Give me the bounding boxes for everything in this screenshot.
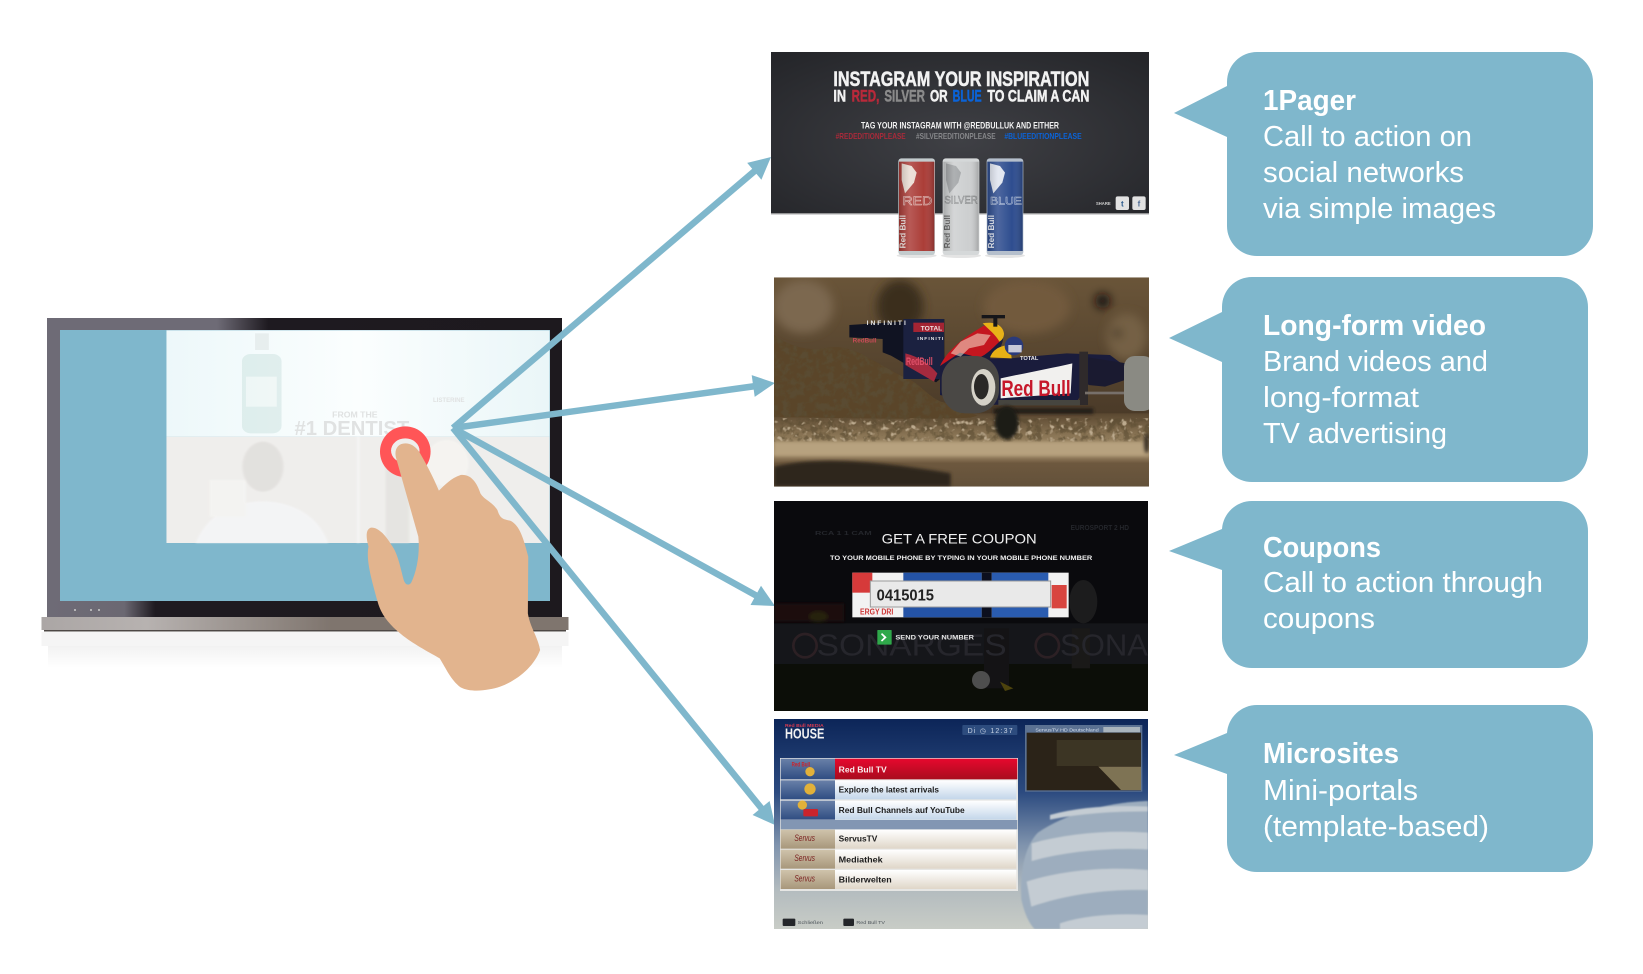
panel headline: IN [833, 87, 846, 106]
car body: Red Bull [1001, 376, 1071, 401]
share buttons: f [1138, 199, 1141, 208]
brush stroke decoration [1021, 801, 1148, 929]
callout: Long-form video [1169, 277, 1588, 482]
rear wing: INFINITI [917, 336, 944, 342]
ghost headline [295, 396, 465, 440]
callout: Coupons: Call to action through [1263, 567, 1543, 599]
tv preview [1025, 725, 1142, 792]
video overlay on screen [166, 330, 550, 543]
panel headline: #SILVEREDITIONPLEASE [916, 131, 996, 141]
background football players [972, 580, 1097, 691]
callout: Microsites: Mini-portals [1263, 775, 1418, 807]
menu labels: Mediathek [839, 855, 883, 864]
dust cloud background [773, 280, 1147, 360]
sponsor board [792, 632, 1148, 658]
monitor bezel [47, 318, 562, 617]
ghost headline: #1 DENTIST [295, 416, 409, 440]
ghost bottle [242, 333, 282, 433]
callout: 1Pager [1174, 52, 1593, 256]
footer hints: Red Bull TV [856, 920, 886, 925]
panel headline: RED, [852, 87, 879, 106]
menu labels: ServusTV [839, 835, 878, 844]
menu labels: Red Bull TV [839, 765, 887, 774]
phone number field: ERGY DRI [860, 607, 893, 616]
coupon heading [830, 534, 1092, 560]
icon: silver can: SILVER [944, 194, 978, 206]
callout: Microsites: Microsites [1263, 738, 1399, 770]
sponsor board: SONARGES [817, 629, 1007, 663]
panel headline: TO CLAIM A CAN [987, 87, 1089, 106]
callout: 1Pager: social networks [1263, 157, 1464, 189]
arrow to microsites [453, 428, 775, 825]
media house logo: HOUSE [785, 727, 824, 743]
panel headline: BLUE [953, 87, 982, 106]
icon: blue can: BLUE [990, 196, 1022, 208]
panel: coupons screenshot [774, 501, 1149, 711]
phone number field: 0415015 [877, 587, 934, 604]
clock pill: Di ◷ 12:37 [968, 728, 1013, 735]
media house logo: Red Bull MEDIA [785, 723, 824, 729]
callout: Long-form video: Brand videos and [1263, 346, 1488, 378]
icon: silver can [941, 158, 981, 258]
menu labels: Explore the latest arrivals [839, 786, 940, 795]
monitor reflection [42, 632, 568, 668]
callout: 1Pager: Call to action on [1263, 121, 1472, 153]
rear wing: RedBull [906, 356, 933, 368]
icon: blue can [985, 158, 1025, 258]
menu row icons [792, 763, 818, 883]
coupon heading: GET A FREE COUPON [882, 532, 1037, 547]
ghost headline: FROM THE [332, 410, 378, 419]
panel headline: OR [930, 87, 948, 106]
arrow to 1Pager [453, 157, 771, 428]
touch gesture [367, 426, 540, 691]
car body: TOTAL [1020, 356, 1039, 362]
panel headline: #BLUEEDITIONPLEASE [1004, 131, 1082, 141]
menu row icons: Red Bull [792, 763, 810, 769]
panel headline [833, 67, 1089, 141]
panel headline: #REDEDITIONPLEASE [836, 131, 906, 141]
sponsor board: SONA [1060, 629, 1149, 663]
callout: Coupons: coupons [1263, 603, 1375, 635]
icon: red can: Red Bull [898, 215, 908, 248]
panel: microsite screenshot [774, 719, 1148, 929]
smudges [995, 406, 1149, 453]
share buttons [1096, 196, 1146, 210]
panel headline: SILVER [884, 87, 925, 106]
send button [877, 630, 974, 645]
car body [940, 315, 1127, 405]
callout: Long-form video: TV advertising [1263, 418, 1447, 450]
rear wing [849, 319, 944, 382]
rear wing: TOTAL [921, 326, 942, 333]
menu row icons: Servus [794, 873, 815, 883]
callout: Microsites: (template-based) [1263, 811, 1489, 843]
panel headline: TAG YOUR INSTAGRAM WITH @REDBULLUK AND EITHER [861, 120, 1059, 130]
arrow to long-form video [453, 375, 775, 428]
icon: red can: RED [902, 194, 933, 208]
callout: Coupons [1169, 501, 1588, 668]
rear wing: RedBull [853, 338, 877, 345]
menu labels [839, 765, 965, 885]
laptop screen device [42, 318, 568, 668]
send button: SEND YOUR NUMBER [895, 635, 974, 642]
ghost presenter [196, 437, 469, 543]
menu row icons: Servus [794, 853, 815, 863]
panel: 1Pager screenshot [771, 52, 1149, 258]
monitor base [42, 617, 568, 632]
arrow to coupons [453, 428, 775, 606]
clock pill [962, 725, 1017, 735]
menu [780, 758, 1018, 891]
tv preview: ServusTV HD Deutschland [1035, 728, 1099, 733]
icon: silver can: Red Bull [942, 215, 952, 248]
callout: Microsites [1174, 705, 1593, 872]
thrown dirt [774, 335, 977, 419]
wheels [942, 356, 1154, 413]
broadcast overlays: RCA 1 1 CAM [815, 531, 872, 537]
phone number field [852, 573, 1069, 617]
menu rows [781, 759, 1017, 889]
callout: 1Pager: 1Pager [1263, 85, 1356, 117]
icon: red touch ring [380, 426, 431, 477]
arrows from touch point to formats [453, 157, 775, 825]
panel: long-form video still [773, 277, 1154, 487]
icon: blue can: Red Bull [986, 215, 996, 248]
menu labels: Bilderwelten [839, 876, 892, 885]
menu row icons: Servus [794, 833, 815, 843]
menu labels: Red Bull Channels auf YouTube [839, 806, 965, 815]
rear wing: INFINITI [867, 320, 908, 327]
broadcast overlays: EUROSPORT 2 HD [1071, 523, 1129, 532]
coupon heading: TO YOUR MOBILE PHONE BY TYPING IN YOUR MOBILE PHONE NUMBER [830, 555, 1093, 562]
ground [774, 408, 1149, 487]
share buttons: t [1121, 199, 1124, 208]
footer hints: Schließen [798, 920, 823, 925]
media house logo [785, 724, 824, 738]
callout: Long-form video: Long-form video [1263, 310, 1486, 342]
footer hints [783, 919, 886, 926]
callout: Long-form video: long-format [1263, 382, 1419, 414]
broadcast overlays [816, 525, 1129, 535]
share buttons: SHARE [1096, 201, 1111, 207]
blue screen [60, 330, 550, 601]
callout: 1Pager: via simple images [1263, 193, 1496, 225]
red bull logo on car [1001, 363, 1072, 398]
icon: red can [897, 158, 937, 258]
ghost headline: LISTERINE [433, 396, 465, 404]
panel headline: INSTAGRAM YOUR INSPIRATION [833, 67, 1089, 91]
callout: Coupons: Coupons [1263, 532, 1381, 564]
icon: hand [367, 443, 540, 691]
